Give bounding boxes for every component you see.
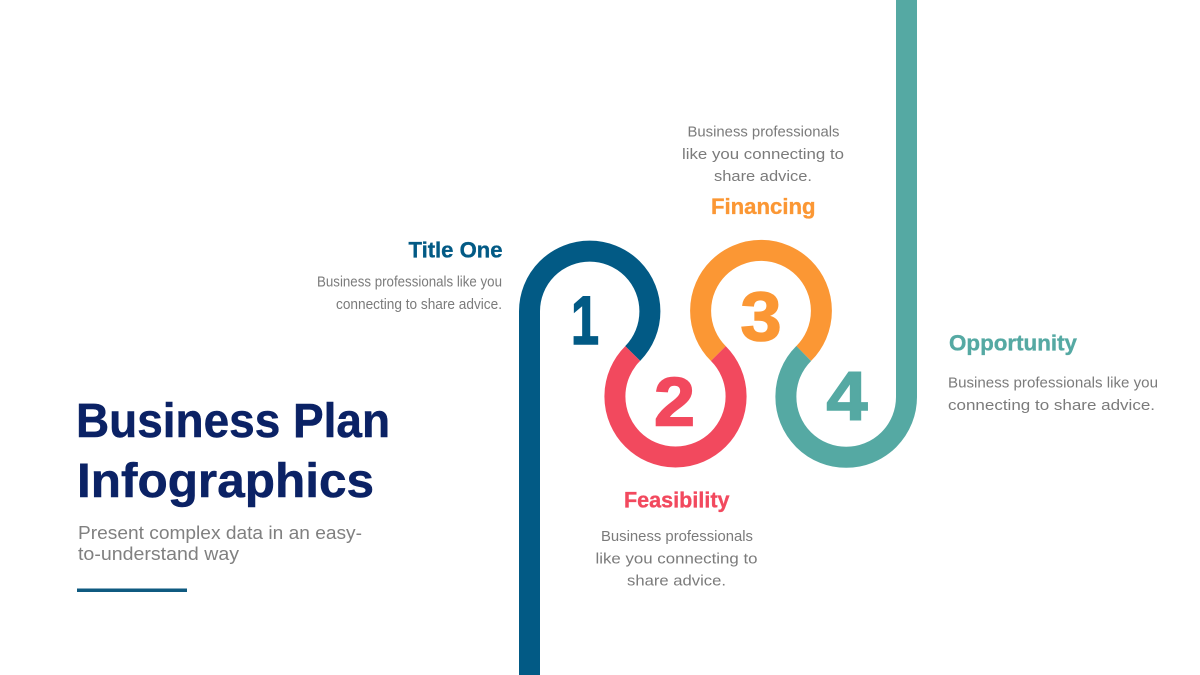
title: Infographics xyxy=(77,455,374,508)
text: title one description: connecting to share advice. xyxy=(336,297,502,313)
text: opportunity description xyxy=(948,375,1158,414)
heading: feasibility: Feasibility xyxy=(624,487,730,512)
number 1: 1 xyxy=(571,282,599,359)
path segment 1: blue xyxy=(530,251,650,675)
text: financing description: share advice. xyxy=(714,169,812,185)
path segment 4: teal xyxy=(786,0,906,457)
number 2: 2 xyxy=(654,364,695,440)
heading: title one: Title One xyxy=(408,237,502,262)
number 4: 4 xyxy=(826,358,868,434)
block: feasibility xyxy=(596,487,758,590)
title xyxy=(76,395,390,508)
text: opportunity description: Business professionals like you xyxy=(948,375,1158,391)
text: feasibility description: Business professionals xyxy=(601,529,753,545)
winding path xyxy=(530,0,906,675)
block: opportunity xyxy=(948,331,1158,414)
title underline xyxy=(77,588,187,592)
block: financing xyxy=(682,125,844,219)
text: feasibility description: share advice. xyxy=(627,574,726,590)
path segment 2: red xyxy=(615,354,736,457)
heading: financing: Financing xyxy=(711,194,816,219)
subtitle: to-understand way xyxy=(78,543,240,564)
block: title one xyxy=(317,237,502,313)
subtitle xyxy=(78,522,362,564)
title: Business Plan xyxy=(76,395,390,448)
text: financing description xyxy=(682,125,844,185)
number 3: 3 xyxy=(740,278,782,355)
text: financing description: Business professionals xyxy=(688,125,840,141)
subtitle: Present complex data in an easy- xyxy=(78,522,362,543)
text: financing description: like you connecting to xyxy=(682,147,844,163)
text: title one description xyxy=(317,275,502,313)
text: feasibility description xyxy=(596,529,758,590)
heading: opportunity: Opportunity xyxy=(949,331,1077,356)
text: opportunity description: connecting to share advice. xyxy=(948,398,1155,414)
path segment 3: orange xyxy=(701,250,821,354)
text: title one description: Business professionals like you xyxy=(317,275,502,291)
text: feasibility description: like you connecting to xyxy=(596,551,758,567)
